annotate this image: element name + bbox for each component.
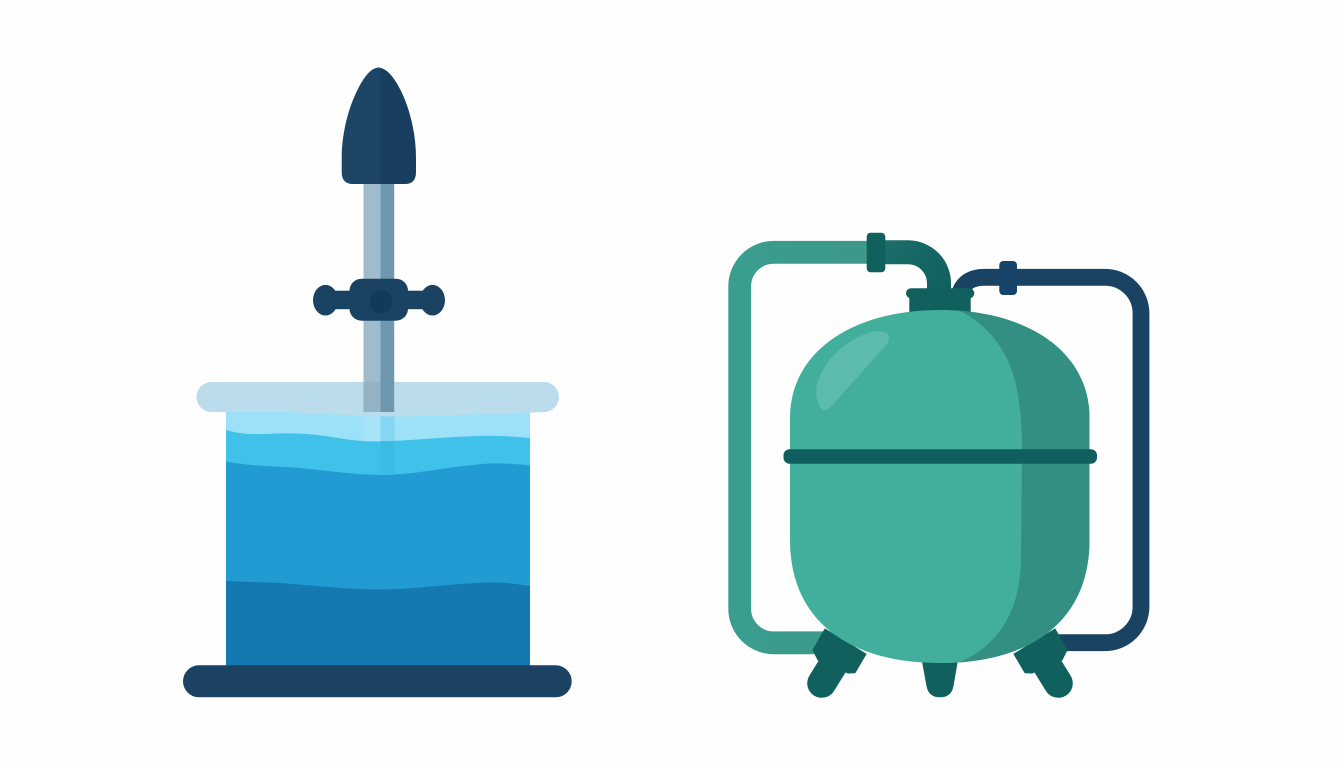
illustration: open tank and pressure vessel [183, 68, 1150, 698]
pressure vessel assembly [740, 233, 1141, 697]
stem [364, 180, 394, 412]
tank base [183, 665, 572, 697]
tank rim [196, 382, 559, 416]
vessel feet [813, 629, 1067, 697]
left green pipe [740, 252, 939, 643]
right blue pipe [960, 277, 1141, 643]
vessel body [785, 305, 1095, 667]
tank water layers [226, 405, 530, 666]
water tank [183, 68, 572, 697]
vessel neck and flange [906, 288, 974, 312]
valve with handles [313, 279, 445, 321]
vessel highlight [816, 331, 889, 410]
bullet-shaped top [342, 68, 416, 184]
pipe collars [867, 233, 1017, 295]
vessel band [784, 449, 1097, 464]
